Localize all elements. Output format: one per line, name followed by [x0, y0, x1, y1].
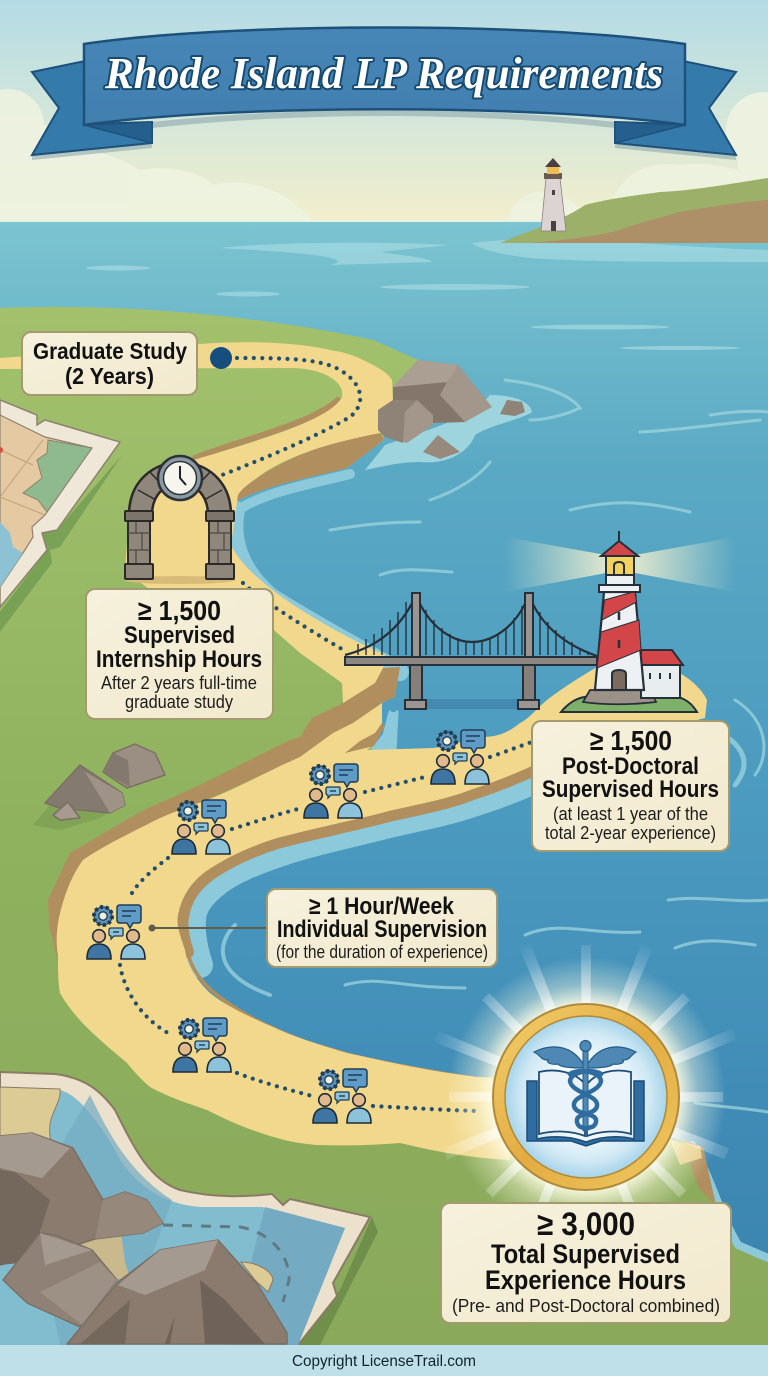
map darker folds — [30, 1095, 172, 1345]
callout: total supervised experience hours: Total Supervised — [491, 1239, 680, 1269]
shore rocks — [378, 360, 525, 459]
callout: supervised internship hours: Internship Hours — [96, 646, 262, 673]
leader line — [148, 924, 268, 932]
banner shadow — [32, 110, 736, 160]
towers — [412, 593, 533, 657]
water shadow — [404, 699, 539, 709]
map parchment — [0, 400, 120, 607]
right fold — [615, 122, 685, 143]
callout: post-doctoral supervised hours — [532, 721, 729, 851]
rock base — [583, 690, 656, 704]
callout: individual supervision: Individual Supervision — [277, 916, 487, 943]
sand path: lower beach and island — [57, 661, 707, 1160]
tower — [595, 592, 644, 690]
dotted path: graduate study to arch — [217, 358, 360, 477]
horizon line — [0, 220, 768, 222]
map green area — [23, 440, 92, 512]
stone arch with clock — [124, 456, 236, 584]
gallery — [599, 585, 640, 592]
front rock — [378, 400, 433, 443]
hangers — [358, 602, 588, 655]
suspension bridge — [345, 593, 597, 709]
ocean wave highlights — [86, 239, 768, 350]
column bases — [125, 564, 153, 579]
team supervision icons — [87, 730, 489, 1123]
callout: individual supervision: ≥ 1 Hour/Week — [309, 893, 455, 920]
bottom-left map — [0, 1072, 378, 1345]
left tail — [32, 60, 152, 155]
map grid lines — [0, 440, 45, 515]
map land — [0, 415, 92, 587]
tower windows — [618, 612, 620, 648]
gold ring — [493, 1004, 679, 1190]
deck — [345, 657, 597, 665]
roof — [601, 541, 638, 556]
clock — [158, 456, 202, 500]
callout: total supervised experience hours: (Pre- and Post-Doctoral combined) — [452, 1296, 720, 1316]
map dashed route — [163, 1225, 289, 1302]
cables — [345, 595, 597, 656]
seal glow — [446, 957, 726, 1237]
map sand mid — [70, 1225, 130, 1280]
map rock front — [67, 1240, 287, 1344]
map shadow — [0, 455, 122, 632]
column capitals — [125, 511, 153, 521]
large rock — [393, 360, 492, 423]
callout: total supervised experience hours: Experience Hours — [485, 1265, 686, 1295]
piers — [410, 665, 535, 700]
open book — [527, 1070, 644, 1146]
rock shadow — [33, 805, 120, 830]
sand path: upper beach — [0, 342, 393, 703]
keeper house — [641, 665, 680, 698]
seal rays — [434, 940, 737, 1217]
callout: total supervised experience hours: ≥ 3,000 — [537, 1206, 635, 1242]
left column — [128, 520, 150, 566]
map sand area — [0, 1087, 60, 1160]
door — [612, 670, 626, 690]
thin cliff limb by the bridge — [345, 723, 385, 753]
footer bar: Copyright LicenseTrail.com — [292, 1353, 476, 1370]
distant lighthouse — [541, 158, 566, 231]
callout: graduate study: (2 Years) — [65, 363, 154, 389]
arch curve — [129, 462, 231, 515]
dotted path: arch to bridge — [243, 583, 347, 652]
start marker — [210, 347, 232, 369]
callout: post-doctoral supervised hours: (at least 1 year of the — [553, 804, 708, 824]
right tail — [615, 60, 736, 155]
map parchment — [0, 1072, 370, 1345]
top-left map — [0, 400, 122, 632]
small rocks — [423, 435, 460, 459]
callout: individual supervision — [267, 889, 497, 967]
caduceus — [534, 1040, 636, 1130]
light beams — [505, 537, 606, 592]
left fold — [84, 122, 152, 143]
callout: supervised internship hours — [86, 589, 273, 719]
callout: supervised internship hours: Supervised — [124, 622, 235, 649]
sky — [0, 0, 768, 222]
cliff right of seal — [670, 1140, 716, 1205]
pier feet — [405, 700, 539, 709]
callout: post-doctoral supervised hours: total 2-year experience) — [545, 823, 716, 843]
green mound — [561, 695, 697, 712]
right column — [209, 520, 231, 566]
inner disc — [505, 1016, 667, 1178]
callout: graduate study: Graduate Study — [33, 338, 187, 364]
map rock middle — [3, 1233, 117, 1327]
clouds — [0, 89, 768, 222]
inland rocks — [33, 744, 165, 830]
dotted path: bridge side to team icons — [120, 742, 532, 1111]
callout: individual supervision: (for the duration of experience) — [276, 942, 488, 962]
medical book seal — [493, 1004, 679, 1190]
arch stone joints — [138, 472, 222, 500]
callout: supervised internship hours: ≥ 1,500 — [138, 595, 221, 626]
callout: graduate study — [22, 332, 197, 395]
water around shore rocks — [365, 395, 532, 470]
callout: supervised internship hours: graduate study — [125, 692, 233, 712]
callout: post-doctoral supervised hours: Post-Doctoral — [562, 753, 699, 780]
cliff edge strips — [48, 400, 545, 1079]
green coastal land — [0, 307, 768, 1345]
footer bar — [0, 1345, 768, 1376]
title: Rhode Island LP Requirements — [104, 49, 663, 98]
red stripes — [597, 592, 641, 668]
callout: supervised internship hours: After 2 years full-time — [101, 673, 257, 693]
callout: post-doctoral supervised hours: ≥ 1,500 — [590, 725, 672, 756]
shallow water rims — [193, 474, 768, 1258]
map sea — [0, 1087, 345, 1345]
callout: total supervised experience hours — [441, 1203, 731, 1323]
callout: post-doctoral supervised hours: Supervised Hours — [542, 776, 719, 803]
banner — [32, 28, 736, 160]
map shadow — [295, 1217, 378, 1345]
lighthouse — [505, 531, 735, 712]
map small island — [241, 1262, 273, 1292]
map red marker — [0, 447, 3, 453]
ribbon — [84, 28, 685, 125]
map rock large — [0, 1133, 163, 1265]
lantern room — [606, 556, 634, 575]
map water — [0, 522, 23, 587]
distant headland — [500, 178, 768, 243]
